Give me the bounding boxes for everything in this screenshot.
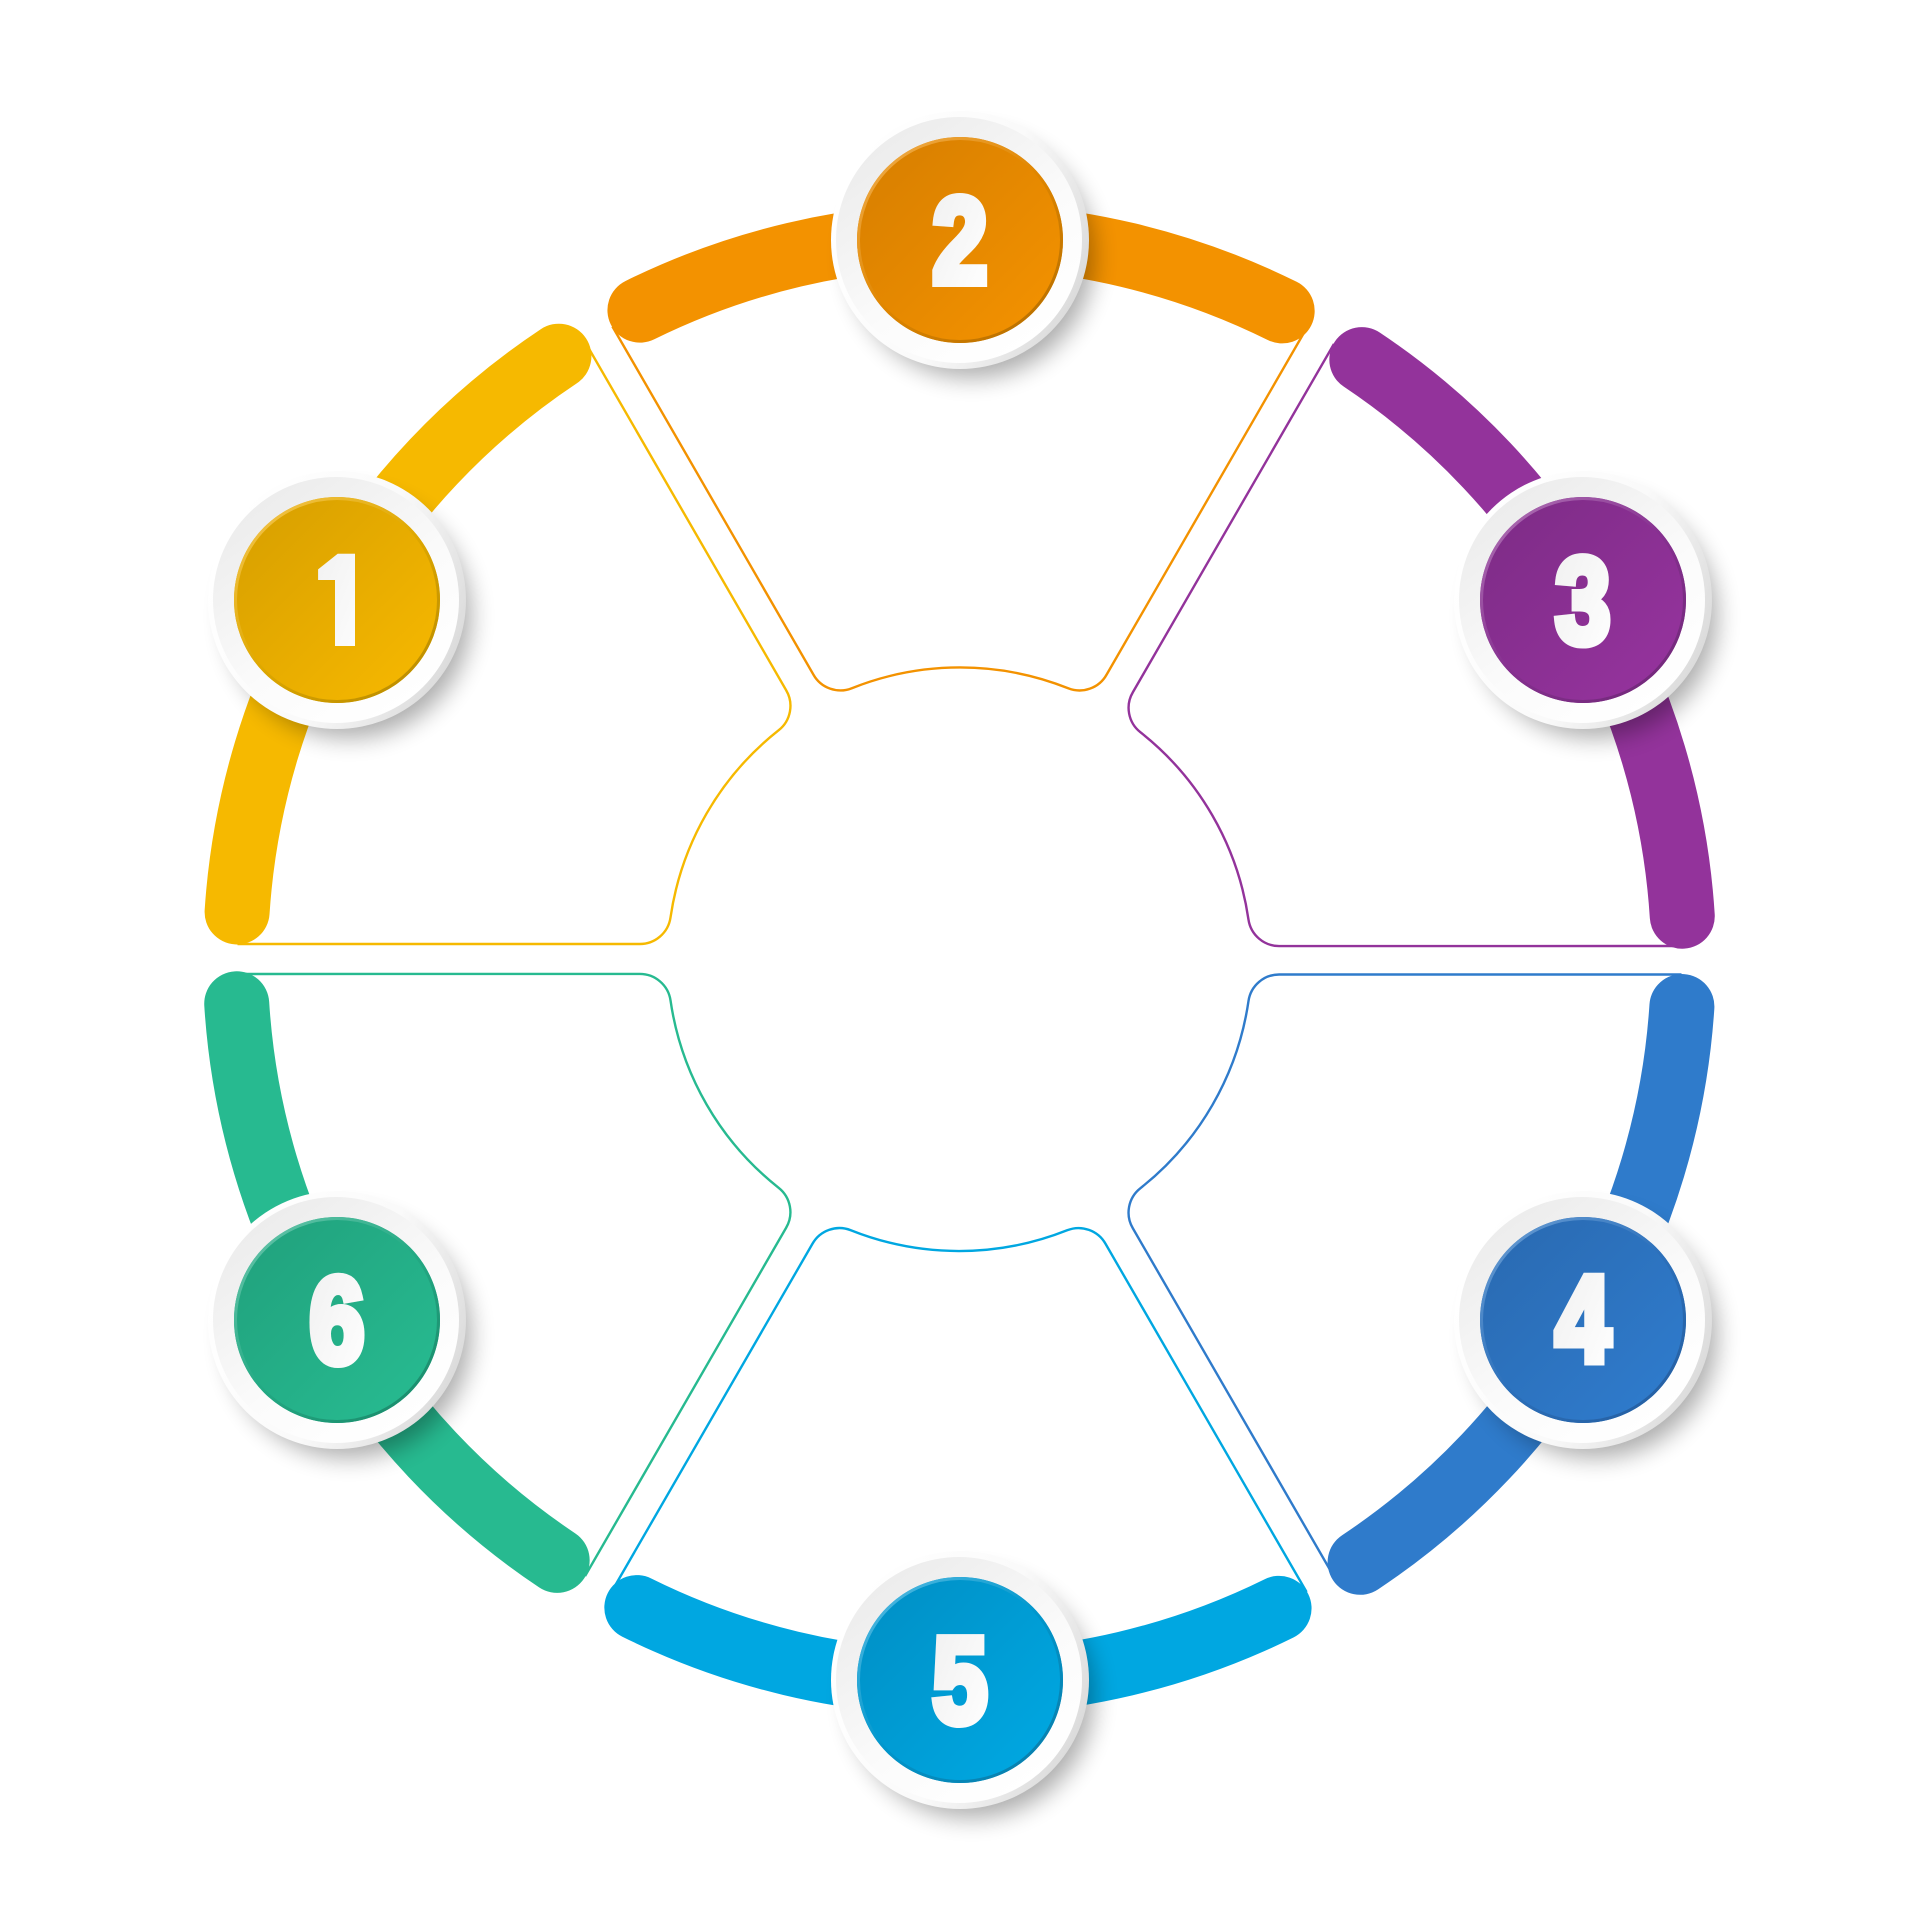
badge: step 6	[208, 1191, 471, 1458]
thick arc: segment 4	[1360, 1006, 1682, 1562]
outline: segment 3	[1057, 344, 1855, 1124]
number 3: 3	[1556, 533, 1610, 669]
outline: segment 2	[612, 25, 1410, 805]
badge: step 3	[1454, 471, 1717, 738]
number 5: 5	[933, 1613, 987, 1749]
six step circular diagram	[204, 117, 1731, 1832]
panel: segment 1	[208, 342, 790, 944]
outline: segment 6	[64, 796, 862, 1576]
number 2: 2	[933, 173, 987, 309]
badge: step 5	[831, 1551, 1094, 1818]
thick arc: segment 1	[237, 356, 559, 912]
badge: step 2	[831, 111, 1094, 378]
badge: step 4	[1454, 1191, 1717, 1458]
thick arc: segment 2	[640, 32, 1282, 589]
outline: segment 5	[509, 1113, 1307, 1893]
number 6: 6	[310, 1253, 364, 1389]
outline: segment 4	[1129, 974, 1682, 1576]
thick arc: segment 3	[1201, 360, 1843, 916]
panel: segment 2	[612, 25, 1410, 805]
number 1: 1	[315, 532, 370, 668]
number 4: 4	[1556, 1251, 1611, 1387]
panel: segment 4	[1129, 974, 1717, 1576]
badge: step 1	[208, 471, 471, 738]
panel: segment 5	[509, 1113, 1307, 1893]
outline: segment 1	[238, 342, 790, 944]
panel: segment 3	[1057, 344, 1855, 1124]
thick arc: segment 6	[76, 1004, 718, 1560]
thick arc: segment 5	[637, 1330, 1279, 1886]
panel: segment 6	[64, 796, 862, 1576]
